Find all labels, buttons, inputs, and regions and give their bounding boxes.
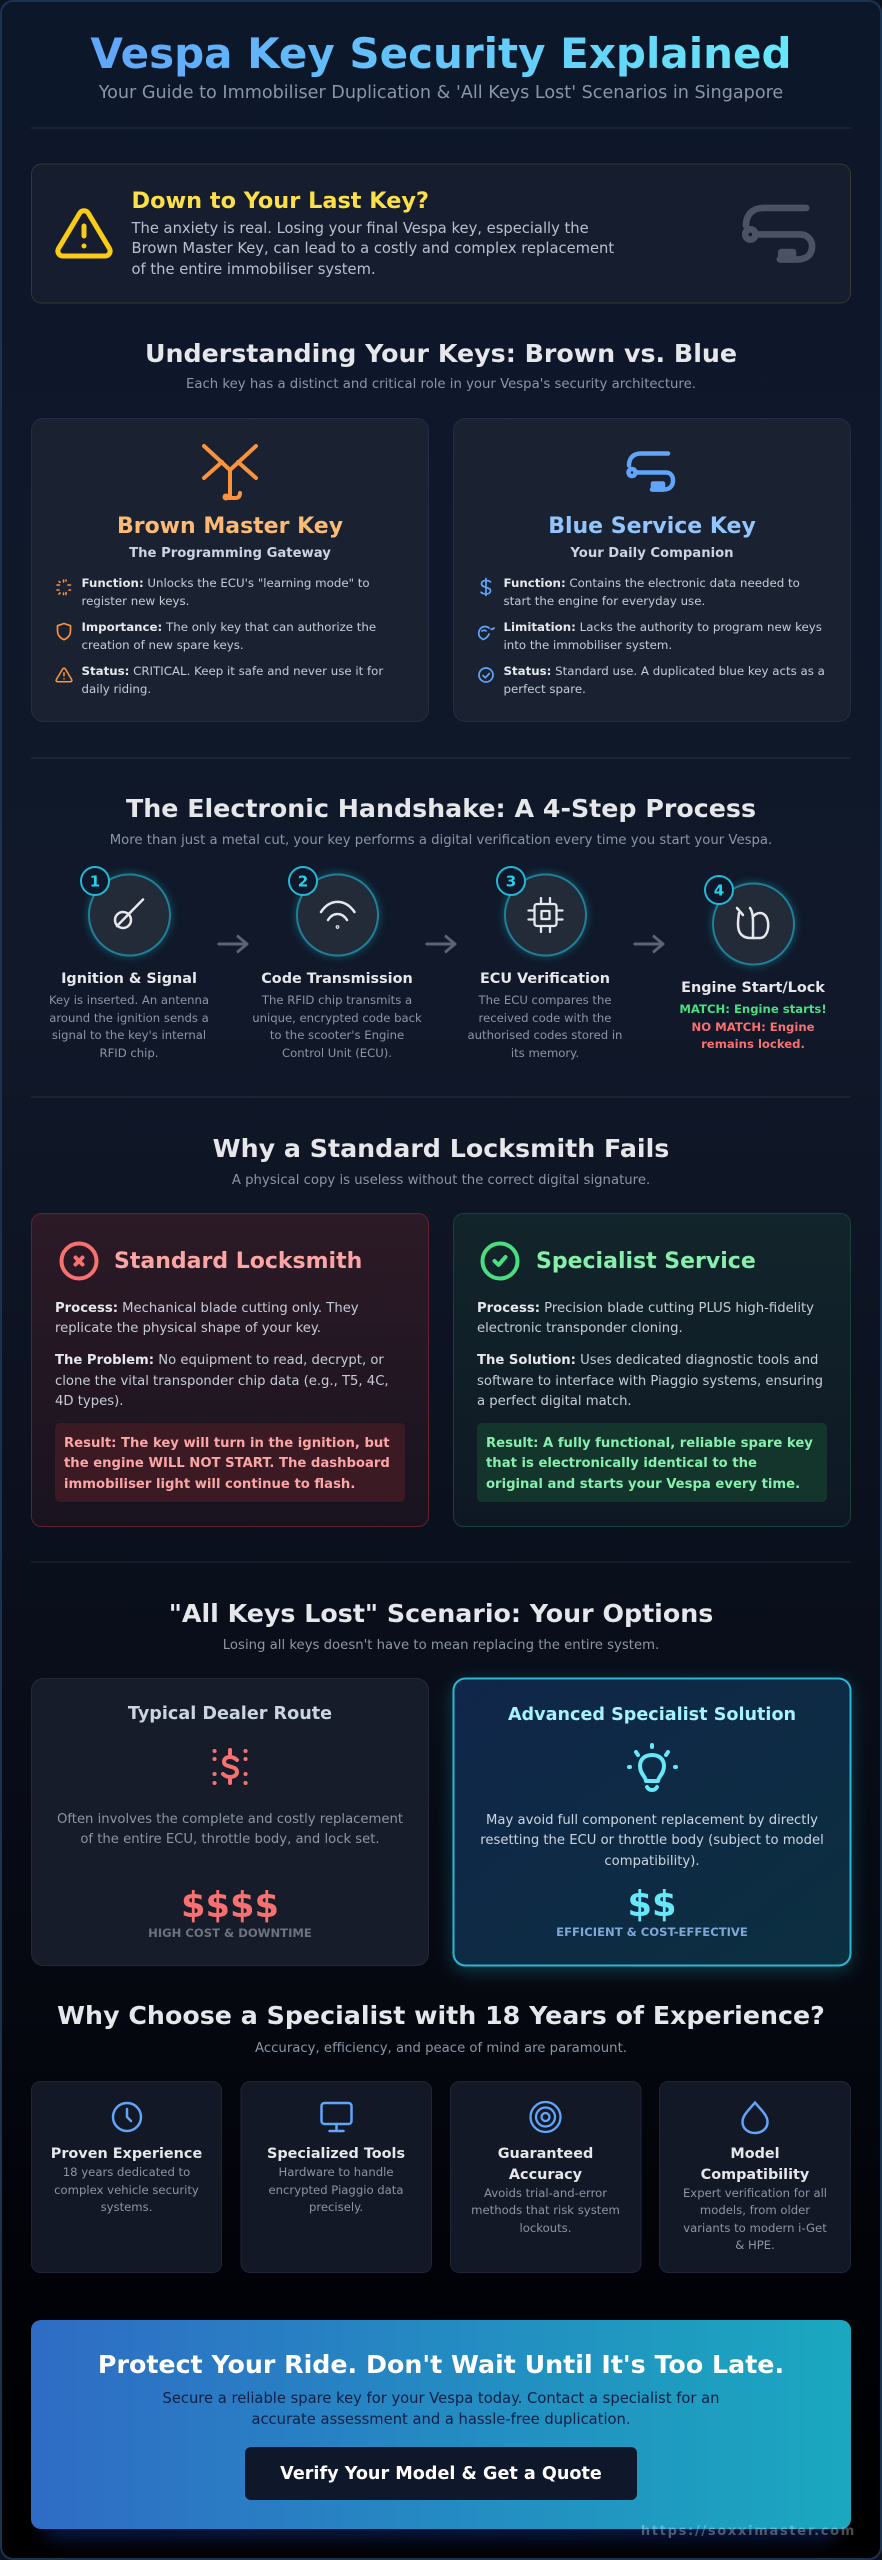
card: guaranteed accuracy: methods that risk system bbox=[471, 2203, 620, 2217]
icon: dollar burst bbox=[214, 1750, 246, 1783]
watermark: https://soxximaster.com bbox=[641, 2524, 856, 2539]
card: model compatibility: Expert verification for all bbox=[683, 2186, 827, 2200]
heading: electronic handshake: More than just a metal cut, your key performs a digital verification every time you start your Vespa. bbox=[110, 833, 772, 848]
card: guaranteed accuracy: Avoids trial-and-error bbox=[484, 2186, 607, 2200]
step 1: RFID chip. bbox=[100, 1046, 158, 1060]
panel: call to action bbox=[31, 2320, 851, 2540]
icon: grey key bbox=[745, 208, 812, 259]
alert text: Brown Master Key, can lead to a costly and complex replacement bbox=[132, 240, 614, 257]
blue key list: perfect spare. bbox=[504, 682, 586, 696]
card: guaranteed accuracy: Accuracy bbox=[509, 2167, 583, 2183]
badge 2 bbox=[289, 867, 317, 895]
heading: understanding keys: Each key has a distinct and critical role in your Vespa's security architecture. bbox=[186, 377, 696, 392]
step 1 bbox=[49, 867, 209, 1060]
panel: standard locksmith bbox=[32, 1214, 428, 1526]
heading: all keys lost: Losing all keys doesn't have to mean replacing the entire system. bbox=[223, 1638, 659, 1653]
alert text: of the entire immobiliser system. bbox=[132, 261, 376, 278]
panel: standard locksmith: replicate the physical shape of your key. bbox=[55, 1321, 321, 1336]
card: proven experience: 18 years dedicated to bbox=[63, 2165, 190, 2179]
result: specialist bbox=[477, 1423, 827, 1502]
panel: specialist solution: May avoid full component replacement by directly bbox=[486, 1813, 818, 1828]
subtitle: Your Guide to Immobiliser Duplication & 'All Keys Lost' Scenarios in Singapore bbox=[98, 83, 783, 103]
badge 4: 4 bbox=[714, 882, 724, 900]
badge 2: 2 bbox=[298, 872, 308, 890]
specialist title: Specialist Service bbox=[536, 1249, 756, 1274]
badge 3: 3 bbox=[506, 872, 516, 890]
heading: locksmith fails: A physical copy is useless without the correct digital signature. bbox=[232, 1173, 650, 1188]
arrow 1 bbox=[219, 936, 247, 952]
panel: specialist service: Process: Precision blade cutting PLUS high-fidelity bbox=[477, 1301, 814, 1316]
badge 4 bbox=[705, 876, 733, 904]
heading: understanding keys: Understanding Your Keys: Brown vs. Blue bbox=[145, 339, 737, 368]
step 4: MATCH: Engine starts! bbox=[679, 1002, 827, 1016]
card: proven experience: systems. bbox=[101, 2200, 152, 2214]
brown key list: Status: CRITICAL. Keep it safe and never use it for bbox=[82, 664, 383, 678]
heading: all keys lost bbox=[169, 1599, 713, 1653]
panel: dealer route: HIGH COST & DOWNTIME bbox=[148, 1926, 312, 1940]
card: model compatibility: Model bbox=[730, 2146, 780, 2162]
card: specialized tools: precisely. bbox=[309, 2200, 363, 2214]
result: locksmith bbox=[55, 1423, 405, 1502]
heading: electronic handshake: The Electronic Handshake: A 4-Step Process bbox=[126, 794, 756, 823]
icon: shield bbox=[58, 624, 70, 640]
icon: hand bbox=[737, 908, 768, 938]
icon: check circle bbox=[482, 1244, 518, 1278]
card: proven experience bbox=[32, 2082, 222, 2272]
heading: all keys lost: "All Keys Lost" Scenario: Your Options bbox=[169, 1599, 713, 1628]
panel: standard locksmith: clone the vital transponder chip data (e.g., T5, 4C, bbox=[55, 1374, 389, 1389]
step 4: NO MATCH: Engine bbox=[691, 1020, 815, 1034]
title: Vespa Key Security Explained bbox=[90, 29, 792, 78]
cta text: Secure a reliable spare key for your Vespa today. Contact a specialist for an bbox=[162, 2390, 720, 2407]
blue key list: into the immobiliser system. bbox=[504, 638, 672, 652]
brown key list bbox=[56, 576, 383, 696]
brown key list: daily riding. bbox=[82, 682, 151, 696]
card: proven experience: Proven Experience bbox=[51, 2146, 202, 2162]
result: locksmith: immobiliser light will continue to flash. bbox=[64, 1477, 355, 1492]
step 2 bbox=[252, 867, 422, 1060]
badge 3 bbox=[497, 867, 525, 895]
price: high: $$$$ bbox=[181, 1885, 279, 1926]
cta text bbox=[162, 2390, 720, 2428]
step 2: The RFID chip transmits a bbox=[261, 993, 412, 1007]
icon: small warning bbox=[56, 668, 72, 682]
step 2: to the scooter's Engine bbox=[270, 1028, 404, 1042]
card: model compatibility bbox=[660, 2082, 850, 2272]
step 1: signal to the key's internal bbox=[52, 1028, 206, 1042]
blue key list: Limitation: Lacks the authority to program new keys bbox=[504, 620, 822, 634]
step 4: Engine Start/Lock bbox=[681, 980, 825, 996]
icon: loader bbox=[57, 580, 70, 594]
panel: blue service key bbox=[454, 418, 850, 722]
blue key list: Status: Standard use. A duplicated blue key acts as a bbox=[504, 664, 825, 678]
brown key list: Function: Unlocks the ECU's "learning mode" to bbox=[82, 576, 370, 590]
icon: check circle bbox=[479, 668, 493, 682]
panel: specialist service: a perfect digital match. bbox=[477, 1394, 632, 1409]
heading: why choose specialist bbox=[57, 2001, 825, 2056]
badge 1: 1 bbox=[90, 872, 100, 890]
step 3 bbox=[468, 867, 622, 1060]
step 3: its memory. bbox=[511, 1046, 579, 1060]
panel: dealer route: Typical Dealer Route bbox=[128, 1704, 332, 1724]
panel: standard locksmith: The Problem: No equipment to read, decrypt, or bbox=[55, 1353, 384, 1368]
panel: brown master key bbox=[32, 418, 428, 722]
price: low: $$ bbox=[628, 1884, 676, 1925]
panel: specialist service: electronic transponder cloning. bbox=[477, 1321, 683, 1336]
step 1: around the ignition sends a bbox=[49, 1011, 209, 1025]
panel: specialist solution: Advanced Specialist Solution bbox=[508, 1705, 796, 1725]
step 3: ECU Verification bbox=[480, 971, 610, 987]
icon: drop bbox=[742, 2102, 768, 2133]
icon: wifi bbox=[321, 902, 354, 928]
panel: specialist solution: compatibility). bbox=[604, 1854, 700, 1869]
panel: alert bbox=[32, 164, 850, 303]
alert text: The anxiety is real. Losing your final Vespa key, especially the bbox=[130, 220, 589, 237]
step 2: Code Transmission bbox=[261, 971, 413, 987]
heading: understanding keys bbox=[145, 339, 737, 392]
arrow 2 bbox=[427, 936, 455, 952]
icon: clock bbox=[113, 2103, 141, 2131]
icon: target bbox=[530, 2102, 560, 2132]
panel: brown master key: The Programming Gateway bbox=[129, 546, 331, 561]
badge 1 bbox=[81, 867, 109, 895]
icon: dollar bbox=[481, 578, 490, 596]
brown key list: register new keys. bbox=[82, 594, 189, 608]
panel: dealer route: Often involves the complete and costly replacement bbox=[57, 1812, 403, 1827]
panel: standard locksmith: Process: Mechanical blade cutting only. They bbox=[55, 1301, 359, 1316]
result: locksmith: the engine WILL NOT START. The dashboard bbox=[64, 1456, 390, 1471]
step 2: unique, encrypted code back bbox=[252, 1011, 422, 1025]
heading: why choose specialist: Accuracy, efficiency, and peace of mind are paramount. bbox=[255, 2041, 627, 2056]
arrow 3 bbox=[635, 936, 663, 952]
panel: blue service key: Your Daily Companion bbox=[569, 546, 734, 561]
icon: blue key bbox=[628, 454, 673, 490]
step 4: remains locked. bbox=[701, 1037, 805, 1051]
button: Verify Your Model & Get a Quote bbox=[280, 2464, 602, 2484]
step 2: Control Unit (ECU). bbox=[282, 1046, 392, 1060]
brown key list: Importance: The only key that can authorize the bbox=[82, 620, 376, 634]
icon: bulb bbox=[629, 1745, 676, 1790]
alert heading: Down to Your Last Key? bbox=[132, 188, 429, 214]
panel: specialist service bbox=[454, 1214, 850, 1526]
cta text: accurate assessment and a hassle-free duplication. bbox=[251, 2411, 631, 2428]
panel: specialist solution: resetting the ECU or throttle body (subject to model bbox=[480, 1833, 824, 1848]
icon: warning triangle bbox=[58, 211, 110, 256]
step 4 bbox=[679, 876, 827, 1051]
alert text bbox=[130, 220, 614, 278]
card: guaranteed accuracy: Guaranteed bbox=[498, 2146, 593, 2162]
locksmith title: Standard Locksmith bbox=[114, 1249, 362, 1274]
blue key title: Blue Service Key bbox=[548, 514, 756, 539]
heading: why choose specialist: Why Choose a Specialist with 18 Years of Experience? bbox=[57, 2001, 825, 2030]
panel: dealer route bbox=[32, 1678, 428, 1966]
panel: specialist service: The Solution: Uses dedicated diagnostic tools and bbox=[477, 1353, 818, 1368]
card: specialized tools: encrypted Piaggio data bbox=[268, 2183, 404, 2197]
result: specialist: original and starts your Vespa every time. bbox=[486, 1477, 800, 1492]
step 1: Ignition & Signal bbox=[61, 971, 197, 987]
heading: locksmith fails: Why a Standard Locksmith Fails bbox=[213, 1134, 669, 1163]
icon: monitor bbox=[322, 2103, 352, 2131]
card: model compatibility: variants to modern i-Get bbox=[683, 2221, 827, 2235]
card: guaranteed accuracy bbox=[450, 2082, 641, 2272]
icon: x circle bbox=[62, 1244, 96, 1278]
step 3: authorised codes stored in bbox=[468, 1028, 622, 1042]
header bbox=[90, 29, 792, 103]
icon: limitation bbox=[479, 626, 494, 640]
panel: standard locksmith: 4D types). bbox=[55, 1394, 123, 1409]
card: specialized tools: Specialized Tools bbox=[267, 2146, 405, 2162]
step 3: The ECU compares the bbox=[478, 993, 612, 1007]
card: model compatibility: & HPE. bbox=[735, 2238, 775, 2252]
brown key title: Brown Master Key bbox=[117, 514, 343, 539]
heading: electronic handshake bbox=[110, 794, 772, 848]
icon: key bbox=[115, 900, 143, 928]
result: specialist: that is electronically identical to the bbox=[486, 1456, 757, 1471]
cta heading: Protect Your Ride. Don't Wait Until It's Too Late. bbox=[98, 2350, 784, 2379]
brown key list: creation of new spare keys. bbox=[82, 638, 244, 652]
card: model compatibility: models, from older bbox=[700, 2203, 810, 2217]
blue key list: start the engine for everyday use. bbox=[504, 594, 705, 608]
result: locksmith: Result: The key will turn in the ignition, but bbox=[64, 1436, 390, 1451]
icon: brown key bbox=[204, 446, 256, 498]
blue key list bbox=[479, 576, 825, 696]
blue key list: Function: Contains the electronic data needed to bbox=[504, 576, 800, 590]
button bbox=[245, 2447, 637, 2500]
result: specialist: Result: A fully functional, reliable spare key bbox=[486, 1436, 813, 1451]
panel: specialist solution: EFFICIENT & COST-EFFECTIVE bbox=[556, 1925, 748, 1939]
step 1: Key is inserted. An antenna bbox=[49, 993, 209, 1007]
step 3: received code with the bbox=[479, 1011, 611, 1025]
heading: locksmith fails bbox=[213, 1134, 669, 1188]
card: model compatibility: Compatibility bbox=[701, 2167, 810, 2183]
icon: chip bbox=[528, 898, 562, 932]
card: proven experience: complex vehicle security bbox=[54, 2183, 199, 2197]
panel: dealer route: of the entire ECU, throttle body, and lock set. bbox=[80, 1832, 380, 1847]
card: specialized tools: Hardware to handle bbox=[279, 2165, 393, 2179]
panel: specialist solution bbox=[454, 1678, 850, 1970]
card: specialized tools bbox=[241, 2082, 432, 2272]
card: guaranteed accuracy: lockouts. bbox=[520, 2221, 571, 2235]
panel: specialist service: software to interface with Piaggio systems, ensuring bbox=[477, 1374, 823, 1389]
